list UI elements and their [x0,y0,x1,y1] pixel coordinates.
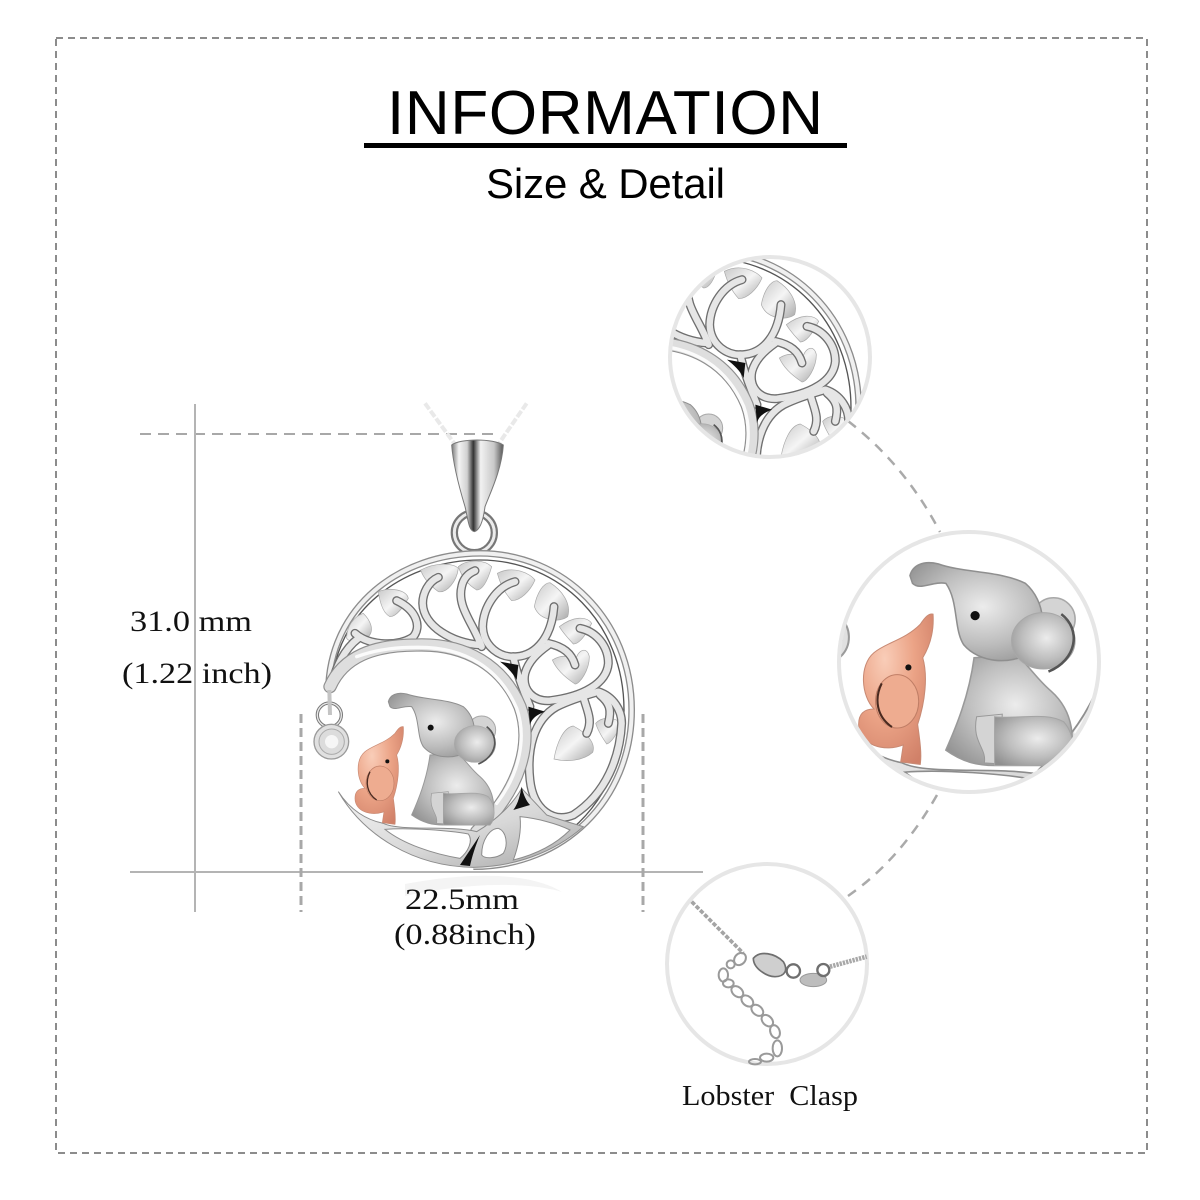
clasp and chain [692,902,867,1064]
jump ring [454,513,494,553]
height label: (1.22 inch) [122,657,272,690]
root openings [385,817,570,860]
connector: elephant detail to clasp detail [848,795,937,896]
bail [452,440,503,532]
height label: 31.0 mm [130,605,252,638]
pendant reflection [405,876,562,896]
leaves [347,561,621,761]
connector: tree detail to elephant detail [848,421,940,532]
grey elephant [388,693,496,825]
title underline [364,143,847,148]
detail circle: tree of life [668,255,872,459]
rose gold elephant [355,727,403,824]
dangling gemstone [314,690,349,759]
dark shadow joints [460,662,545,866]
necklace chain, faded [425,403,527,447]
moon ring outline [328,553,632,867]
dimension guide lines [130,404,703,912]
width label: 22.5mm [405,883,519,916]
root and base of crescent [338,788,583,867]
subtitle: Size & Detail [486,160,725,207]
pendant illustration [314,403,632,867]
title: INFORMATION [387,79,823,148]
inner crescent band [330,645,525,832]
width label: (0.88inch) [394,918,536,951]
width label [394,883,536,951]
height label [122,605,272,690]
clasp label: Lobster Clasp [682,1081,858,1112]
detail circle: elephants [837,530,1101,794]
detail circle: lobster clasp [667,864,867,1064]
tree branches [330,571,622,832]
